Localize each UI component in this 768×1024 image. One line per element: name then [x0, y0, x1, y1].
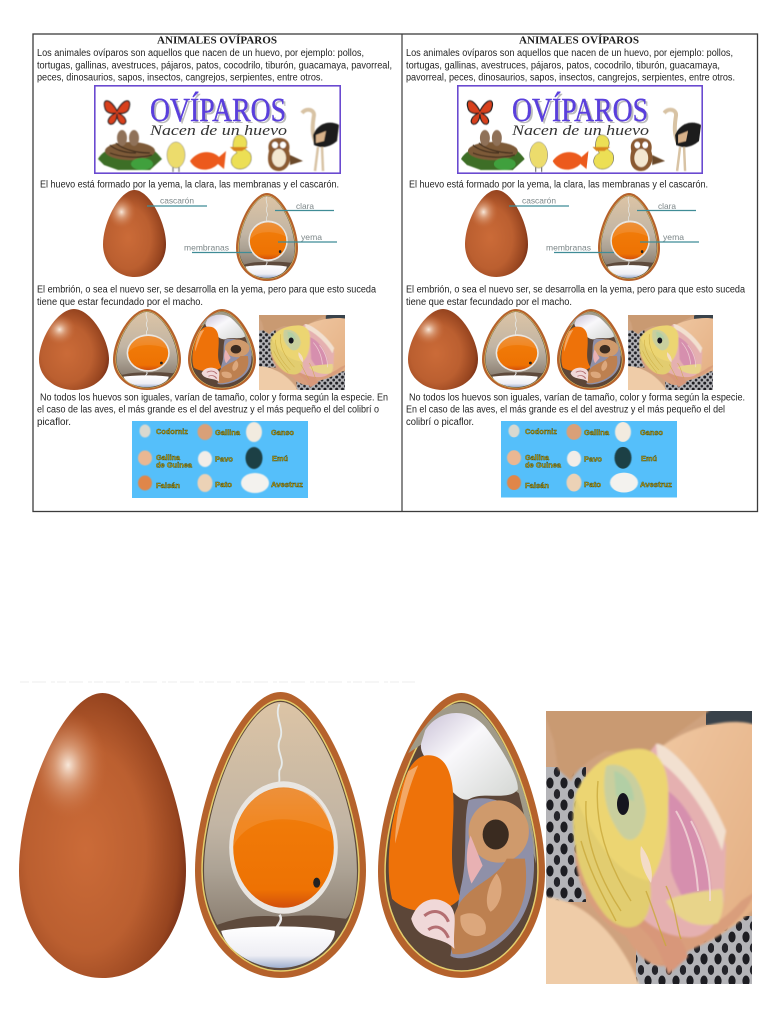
icon: whole egg with label — [103, 190, 207, 277]
icon: whole egg with label — [465, 190, 569, 277]
icon: egg section with labels: clara — [658, 201, 676, 211]
banner: oviparos — [458, 86, 702, 173]
legend: bird eggs: Avestruz — [640, 480, 672, 489]
banner: oviparos: OVÍPAROS — [512, 92, 648, 129]
heading: ANIMALES OVÍPAROS — [157, 34, 277, 46]
legend: bird eggs — [501, 421, 677, 498]
intro text: pavorreal, peces, dinosaurios, sapos, insectos, cangrejos, serpientes, entre otros. — [406, 72, 735, 84]
intro text: peces, dinosaurios, sapos, insectos, cangrejos, serpientes, entre otros. — [37, 72, 323, 84]
legend: bird eggs: Codorniz — [156, 427, 188, 436]
text: egg variety — [406, 392, 745, 428]
banner: oviparos — [95, 86, 340, 173]
legend: bird eggs: Gallina — [215, 428, 241, 437]
legend: bird eggs: Emú — [272, 454, 288, 463]
icon: egg section with labels — [546, 193, 699, 281]
faint scan line — [20, 681, 415, 683]
banner: oviparos: OVÍPAROS — [514, 94, 650, 131]
image row: egg development — [39, 309, 347, 391]
icon: egg section with labels: clara — [296, 201, 314, 211]
banner: oviparos: OVÍPAROS — [150, 92, 286, 129]
icon: egg section with labels: yema — [663, 232, 684, 242]
legend: bird eggs: de Guinea — [525, 460, 562, 470]
legend: bird eggs: Ganso — [271, 428, 294, 437]
legend: bird eggs: de Guinea — [156, 460, 193, 470]
intro text — [37, 48, 392, 84]
text: egg parts: El huevo está formado por la yema, la clara, las membranas y el cascarón. — [409, 180, 708, 190]
legend: bird eggs: Faisán — [156, 481, 180, 490]
icon: whole egg with label: cascarón — [522, 196, 556, 206]
icon: large egg cross-section — [195, 692, 366, 978]
text: egg variety — [37, 392, 388, 428]
legend: bird eggs: Pato — [215, 480, 232, 489]
intro text: tortugas, gallinas, avestruces, pájaros, patos, cocodrilo, tiburón, guacamaya, — [406, 60, 720, 72]
legend: bird eggs: Gallina — [156, 453, 181, 462]
text: embryo: tiene que estar fecundado por el macho. — [406, 297, 572, 308]
legend: bird eggs: Pavo — [215, 454, 233, 464]
intro text: tortugas, gallinas, avestruces, pájaros, patos, cocodrilo, tiburón, guacamaya, pavorreal, — [37, 60, 392, 72]
text: embryo — [37, 284, 376, 308]
banner: oviparos: Nacen de un huevo — [149, 123, 288, 139]
intro text — [406, 48, 735, 84]
heading: ANIMALES OVÍPAROS — [519, 34, 639, 46]
icon: large egg with embryo — [378, 693, 545, 978]
legend: bird eggs: Avestruz — [271, 480, 303, 489]
text: egg variety: No todos los huevos son iguales, varían de tamaño, color y forma según la especie. En — [40, 392, 388, 404]
legend: bird eggs: Ganso — [640, 428, 663, 437]
icon: egg section with labels: membranas — [184, 242, 229, 252]
intro text: Los animales ovíparos son aquellos que nacen de un huevo, por ejemplo: pollos, — [37, 48, 364, 59]
text: egg variety: colibrí o picaflor. — [406, 417, 474, 428]
photo: hatching chick — [542, 707, 756, 988]
icon: egg section with labels — [184, 193, 337, 281]
icon: egg section with labels: membranas — [546, 242, 591, 252]
legend: bird eggs: Gallina — [525, 453, 550, 462]
intro text: Los animales ovíparos son aquellos que nacen de un huevo, por ejemplo: pollos, — [406, 48, 733, 59]
text: egg variety: En el caso de las aves, el más grande es el del avestruz y el más pequeño el del — [406, 404, 725, 416]
banner: oviparos: Nacen de un huevo — [511, 123, 650, 139]
text: egg parts: El huevo está formado por la yema, la clara, las membranas y el cascarón. — [40, 180, 339, 190]
table frame — [33, 34, 758, 512]
legend: bird eggs: Gallina — [584, 428, 610, 437]
icon: whole egg with label: cascarón — [160, 196, 194, 206]
icon: large whole egg — [19, 693, 186, 978]
legend: bird eggs: Codorniz — [525, 427, 557, 436]
panel: left card — [37, 34, 392, 498]
banner: oviparos: OVÍPAROS — [152, 94, 288, 131]
legend: bird eggs: Emú — [641, 454, 657, 463]
text: embryo: tiene que estar fecundado por el macho. — [37, 297, 203, 308]
icon: egg section with labels: yema — [301, 232, 322, 242]
text: embryo: El embrión, o sea el nuevo ser, se desarrolla en la yema, pero para que esto suceda — [37, 284, 376, 296]
panel: right card — [406, 34, 745, 498]
text: egg variety: picaflor. — [37, 417, 71, 428]
legend: bird eggs: Faisán — [525, 481, 549, 490]
text: egg variety: el caso de las aves, el más grande es el del avestruz y el más pequeño el del colibrí o — [37, 404, 379, 416]
legend: bird eggs — [132, 421, 308, 498]
image row: egg development — [408, 309, 715, 391]
legend: bird eggs: Pato — [584, 480, 601, 489]
text: embryo — [406, 284, 745, 308]
legend: bird eggs: Pavo — [584, 454, 602, 464]
